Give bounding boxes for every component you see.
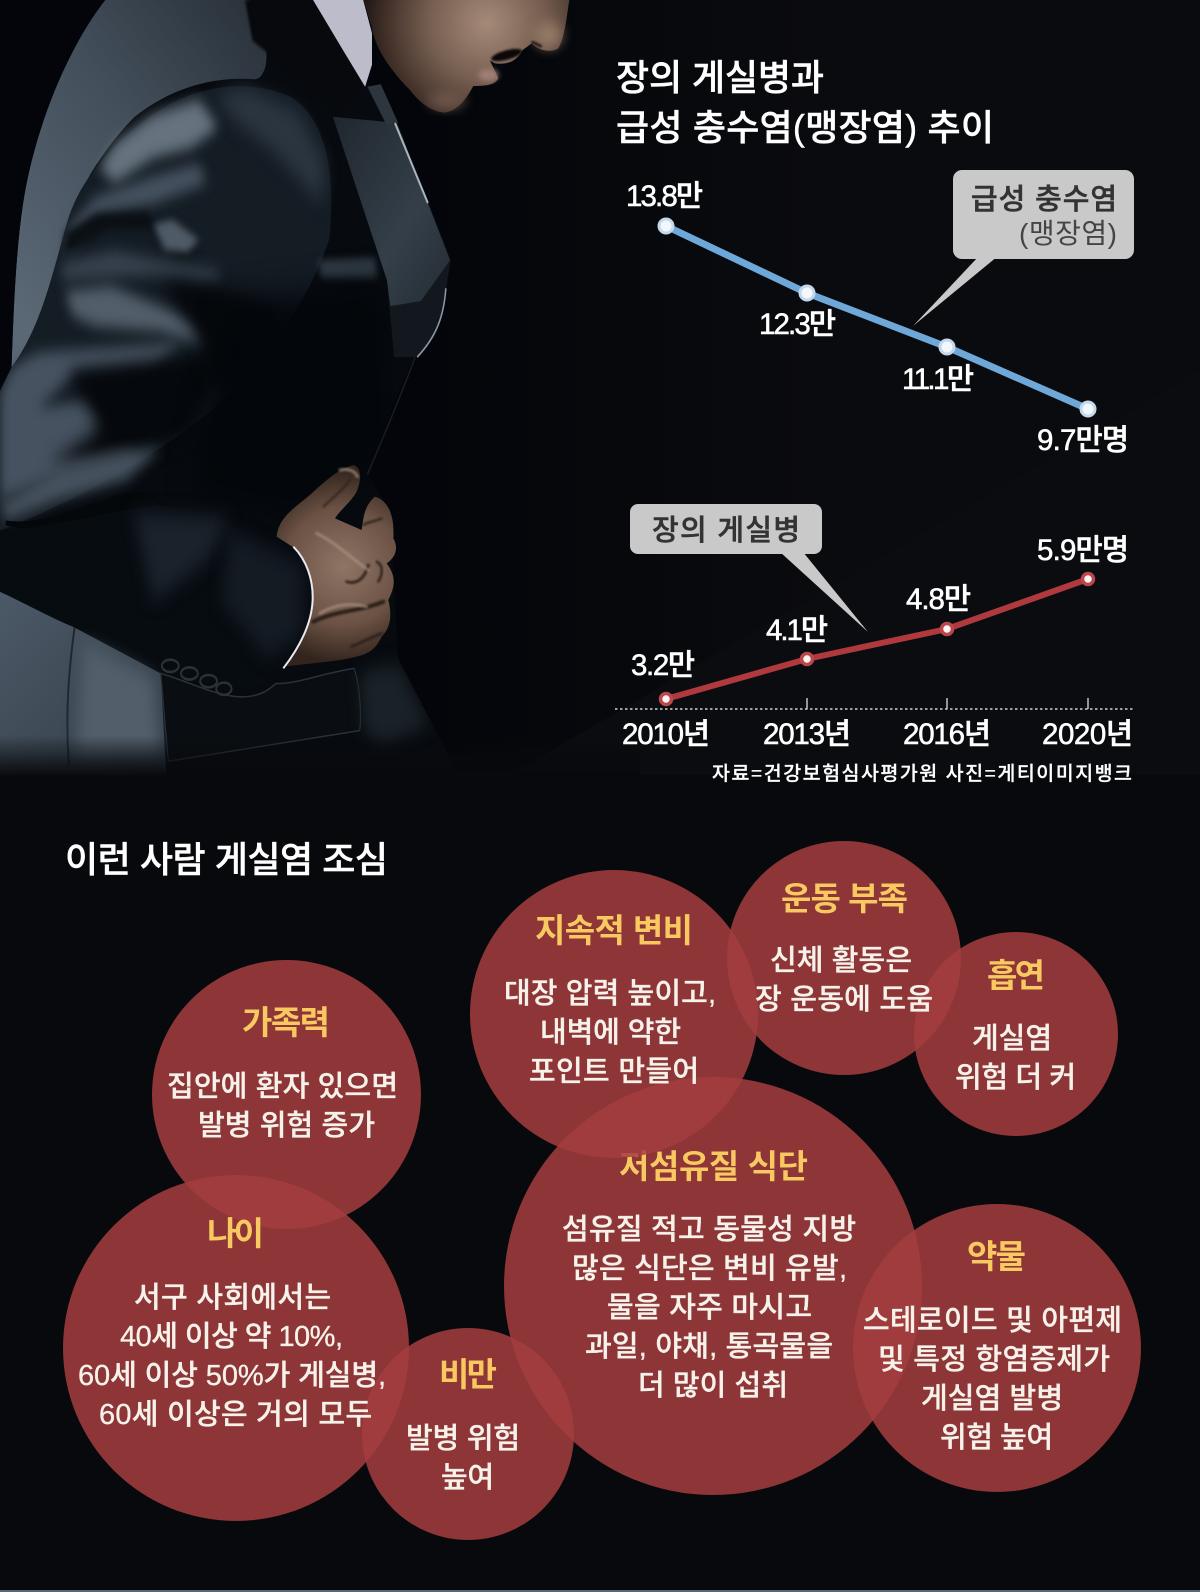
- year labels: [622, 718, 1133, 751]
- face: [363, 0, 569, 113]
- bubble: medication: 위험 높여: [940, 1421, 1053, 1454]
- lapel and tie: [333, 117, 450, 357]
- bubble: family history: [152, 960, 421, 1229]
- value labels: 12.3만: [759, 308, 836, 341]
- value labels: 4.1만: [766, 614, 828, 647]
- pocket: [161, 668, 360, 761]
- value labels: [631, 534, 1129, 682]
- hand: [277, 465, 396, 668]
- bubble: age: 40세 이상 약 10%,: [120, 1320, 343, 1353]
- year labels: 2013년: [763, 718, 851, 751]
- sleeve base: [0, 86, 331, 531]
- bubble: smoking: 흡연: [987, 957, 1045, 994]
- bubble: medication: 약물: [967, 1238, 1026, 1275]
- bubble: medication: [853, 1204, 1141, 1492]
- hand creases: [313, 480, 383, 647]
- shirt cuff: [283, 547, 313, 668]
- bubble: family history: 발병 위험 증가: [198, 1109, 375, 1142]
- bubble: lack of exercise: 운동 부족: [781, 880, 908, 917]
- bubble: family history: 가족력: [242, 1004, 330, 1041]
- bubble: chronic constipation: 지속적 변비: [535, 912, 693, 949]
- bubble: chronic constipation: [470, 870, 758, 1158]
- year labels: 2016년: [903, 718, 991, 751]
- bubble: family history: 집안에 환자 있으면: [167, 1070, 398, 1103]
- section heading: 이런 사람 게실염 조심: [65, 839, 388, 880]
- bubble: age: 60세 이상은 거의 모두: [99, 1398, 372, 1431]
- bubble: obesity: [362, 1328, 574, 1540]
- value labels: 5.9만명: [1037, 534, 1129, 567]
- chart title: 장의 게실병과: [616, 57, 824, 98]
- shirt collar: [313, 0, 372, 87]
- bubble: lack of exercise: 신체 활동은: [770, 944, 912, 977]
- line chart: diverticular disease: [631, 534, 1129, 704]
- bubble: chronic constipation: 내벽에 약한: [540, 1016, 681, 1049]
- line chart: acute appendicitis: [626, 180, 1129, 457]
- value labels: 3.2만: [631, 649, 695, 682]
- jacket body: [0, 0, 459, 781]
- source note: 자료=건강보험심사평가원 사진=게티이미지뱅크: [712, 763, 1132, 785]
- bubble: medication: 게실염 발병: [921, 1382, 1063, 1415]
- forearm: [0, 505, 312, 692]
- value labels: 4.8만: [906, 583, 971, 616]
- bubble: medication: 및 특정 항염증제가: [878, 1343, 1110, 1376]
- chart title: 급성 충수염(맹장염) 추이: [616, 107, 994, 148]
- year labels: 2020년: [1042, 718, 1133, 751]
- bubble: low-fiber diet: 섬유질 적고 동물성 지방: [562, 1213, 856, 1246]
- callout: acute appendicitis: 급성 충수염: [971, 183, 1117, 216]
- bubble: low-fiber diet: 많은 식단은 변비 유발,: [572, 1252, 847, 1285]
- bubble: chronic constipation: 포인트 만들어: [529, 1055, 699, 1088]
- chart title: [616, 57, 994, 148]
- bubble: age: 서구 사회에서는: [134, 1281, 331, 1314]
- bubble: low-fiber diet: 과일, 야채, 통곡물을: [585, 1330, 833, 1363]
- bubble: age: [63, 1175, 409, 1521]
- value labels: [626, 180, 1129, 457]
- bubble: lack of exercise: 장 운동에 도움: [755, 983, 933, 1016]
- bubble: low-fiber diet: [504, 1077, 922, 1495]
- bubble: medication: 스테로이드 및 아편제: [863, 1304, 1122, 1337]
- x axis: [615, 698, 1134, 751]
- lower jacket: [0, 592, 166, 781]
- data points: [659, 219, 1095, 416]
- callout: diverticular disease: 장의 게실병: [652, 514, 800, 547]
- callout: acute appendicitis: (맹장염): [1019, 218, 1117, 249]
- bubble: smoking: 위험 더 커: [955, 1061, 1076, 1094]
- bubble: obesity: 비만: [439, 1356, 497, 1393]
- bubble: smoking: 게실염: [972, 1022, 1052, 1055]
- value labels: 9.7만명: [1037, 424, 1129, 457]
- callout: diverticular disease: [630, 504, 868, 632]
- year labels: 2010년: [622, 718, 710, 751]
- data points: [660, 574, 1094, 704]
- sleeve buttons: [162, 660, 232, 695]
- bubble: low-fiber diet: 물을 자주 마시고: [607, 1291, 812, 1324]
- photo bottom fade: [0, 735, 640, 777]
- photo: man in a suit clutching his abdomen: [0, 0, 569, 781]
- callout: acute appendicitis: [913, 170, 1134, 326]
- bubble: lack of exercise: [727, 841, 961, 1075]
- bubble: low-fiber diet: 더 많이 섭취: [638, 1369, 788, 1402]
- bubble: chronic constipation: 대장 압력 높이고,: [504, 977, 716, 1010]
- bubble: low-fiber diet: 저섬유질 식단: [619, 1148, 808, 1185]
- bubble: obesity: 발병 위험: [406, 1422, 520, 1455]
- sleeve folds: [214, 87, 325, 204]
- value labels: 13.8만: [626, 180, 703, 213]
- bubble: age: 나이: [207, 1215, 264, 1252]
- bubble: obesity: 높여: [441, 1461, 494, 1494]
- bubble: age: 60세 이상 50%가 게실병,: [78, 1359, 386, 1392]
- bubble: smoking: [914, 932, 1118, 1136]
- value labels: 11.1만: [902, 363, 974, 396]
